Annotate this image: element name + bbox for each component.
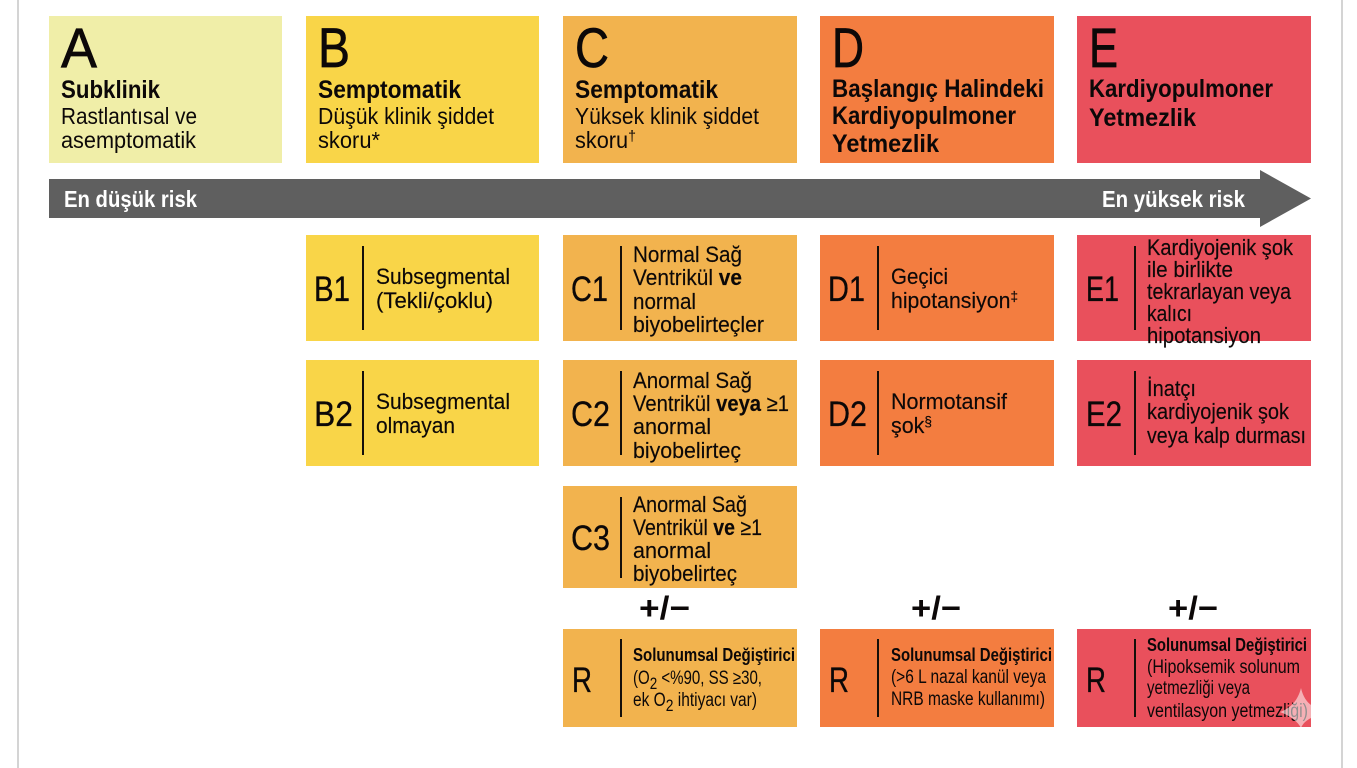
- panel: R for D: Solunumsal Değiştirici: [891, 645, 1052, 665]
- panel: C3: C3: [571, 519, 610, 558]
- description C: Yüksek klinik şiddet: [575, 103, 760, 129]
- panel: R for C: ihtiyacı var): [673, 690, 757, 711]
- panel: C2: biyobelirteç: [633, 438, 741, 463]
- panel: D başlangıç halindeki: [820, 16, 1054, 163]
- panel: D2: şok: [891, 413, 925, 438]
- panel: C1: Ventrikül ve: [633, 265, 742, 290]
- heading E: Yetmezlik: [1089, 104, 1196, 132]
- panel: R for E: Solunumsal Değiştirici: [1147, 635, 1307, 655]
- panel: D2: D2: [828, 395, 867, 434]
- description C: [575, 103, 760, 153]
- panel: A subklinik: [49, 16, 282, 163]
- panel: C1: normal: [633, 289, 696, 314]
- panel: C1: Normal Sağ: [633, 242, 742, 267]
- panel: D2: Normotansif: [891, 389, 1008, 414]
- panel: D1: hipotansiyon: [891, 288, 1015, 313]
- panel: D1: Geçici: [891, 264, 948, 289]
- panel: B1: [306, 235, 539, 341]
- panel: B1: (Tekli/çoklu): [376, 288, 493, 313]
- panel: R for D: R: [829, 661, 849, 700]
- heading D: Başlangıç Halindeki: [832, 75, 1044, 103]
- label: highest risk: En yüksek risk: [1102, 186, 1245, 212]
- description C: skoru: [575, 127, 631, 153]
- panel: C2: Ventrikül veya ≥1: [633, 391, 789, 416]
- panel: B2: B2: [314, 395, 353, 434]
- plus/minus C: +/−: [639, 590, 690, 626]
- panel: D2: §: [924, 413, 932, 429]
- panel: B semptomatik: [306, 16, 539, 163]
- panel: R for E: [1077, 629, 1311, 728]
- panel: E1: hipotansiyon: [1147, 323, 1261, 348]
- panel: C1: C1: [571, 270, 608, 309]
- panel: E2: kardiyojenik şok: [1147, 399, 1290, 424]
- panel: E1: [1077, 235, 1311, 348]
- description B: [318, 103, 495, 153]
- panel: C3: biyobelirteç: [633, 561, 737, 586]
- panel: E2: [1077, 360, 1311, 466]
- description A: [61, 103, 197, 153]
- panel: C1: [563, 235, 797, 341]
- letter D: D: [832, 16, 864, 79]
- icon: watermark sparkle: [1280, 688, 1311, 728]
- panel: D1: ‡: [1010, 288, 1018, 304]
- panel: B2: [306, 360, 539, 466]
- description A: asemptomatik: [61, 127, 196, 153]
- panel: R for E: R: [1086, 661, 1106, 700]
- panel: B1: B1: [314, 270, 350, 309]
- panel: B2: olmayan: [376, 413, 455, 438]
- description A: Rastlantısal ve: [61, 103, 197, 129]
- panel: R for D: (>6 L nazal kanül veya: [891, 667, 1046, 688]
- panel: C2: C2: [571, 395, 610, 434]
- panel: B1: Subsegmental: [376, 264, 510, 289]
- plus/minus D: +/−: [911, 590, 961, 626]
- panel: R for C: <%90, SS ≥30,: [657, 668, 762, 689]
- panel: E2: E2: [1086, 395, 1122, 434]
- heading D: Yetmezlik: [832, 130, 939, 158]
- panel: B2: Subsegmental: [376, 389, 510, 414]
- panel: R for E: (Hipoksemik solunum: [1147, 657, 1300, 678]
- panel: D1: [820, 235, 1054, 341]
- panel: D1: D1: [828, 270, 865, 309]
- panel: E2: veya kalp durması: [1147, 423, 1306, 448]
- panel: R for E: yetmezliği veya: [1147, 678, 1250, 699]
- panel: E1: kalıcı: [1147, 301, 1192, 326]
- heading: Semptomatik: Semptomatik: [575, 76, 718, 104]
- heading E: [1089, 75, 1273, 132]
- panel: R for C: ek O: [633, 690, 673, 711]
- description C: †: [628, 128, 636, 145]
- description B: Düşük klinik şiddet: [318, 103, 495, 129]
- heading D: Kardiyopulmoner: [832, 102, 1016, 130]
- panel: E1: tekrarlayan veya: [1147, 279, 1292, 304]
- plus/minus E: +/−: [1168, 590, 1218, 626]
- panel: C3: [563, 486, 797, 588]
- panel: R for D: [820, 629, 1054, 727]
- panel: C2: Anormal Sağ: [633, 368, 752, 393]
- panel: R for C: 2: [666, 696, 673, 715]
- label: lowest risk: En düşük risk: [64, 186, 197, 212]
- heading: Semptomatik: Semptomatik: [318, 76, 461, 104]
- panel: C2: anormal: [633, 414, 711, 439]
- panel: C3: Anormal Sağ: [633, 492, 747, 517]
- panel: E1: ile birlikte: [1147, 257, 1233, 282]
- letter E: E: [1089, 16, 1118, 79]
- panel: C3: anormal: [633, 538, 711, 563]
- description B: skoru*: [318, 127, 380, 153]
- panel: E1: Kardiyojenik şok: [1147, 235, 1294, 260]
- panel: E2: İnatçı: [1147, 376, 1196, 401]
- letter B: B: [318, 16, 350, 79]
- panel: R for C: R: [572, 661, 592, 700]
- panel: E kardiyopulmoner yetmezlik: [1077, 16, 1311, 163]
- panel: E1: E1: [1086, 270, 1119, 309]
- heading: Subklinik: Subklinik: [61, 76, 160, 104]
- panel: R for C: Solunumsal Değiştirici: [633, 645, 795, 665]
- panel: R for C: 2: [650, 674, 657, 693]
- heading D: [832, 75, 1044, 158]
- panel: R for E: ventilasyon yetmezliği): [1147, 701, 1308, 722]
- letter A: A: [61, 16, 98, 79]
- panel: C1: biyobelirteçler: [633, 312, 764, 337]
- panel: C2: [563, 360, 797, 466]
- panel: C semptomatik: [563, 16, 797, 163]
- panel: C3: Ventrikül ve ≥1: [633, 515, 762, 540]
- panel: R for D: NRB maske kullanımı): [891, 689, 1045, 710]
- panel: D2: [820, 360, 1054, 466]
- heading E: Kardiyopulmoner: [1089, 75, 1273, 103]
- panel: R for C: (O: [633, 668, 654, 689]
- letter C: C: [575, 16, 609, 79]
- arrow: risk scale: [49, 170, 1311, 227]
- panel: R for C: [563, 629, 797, 727]
